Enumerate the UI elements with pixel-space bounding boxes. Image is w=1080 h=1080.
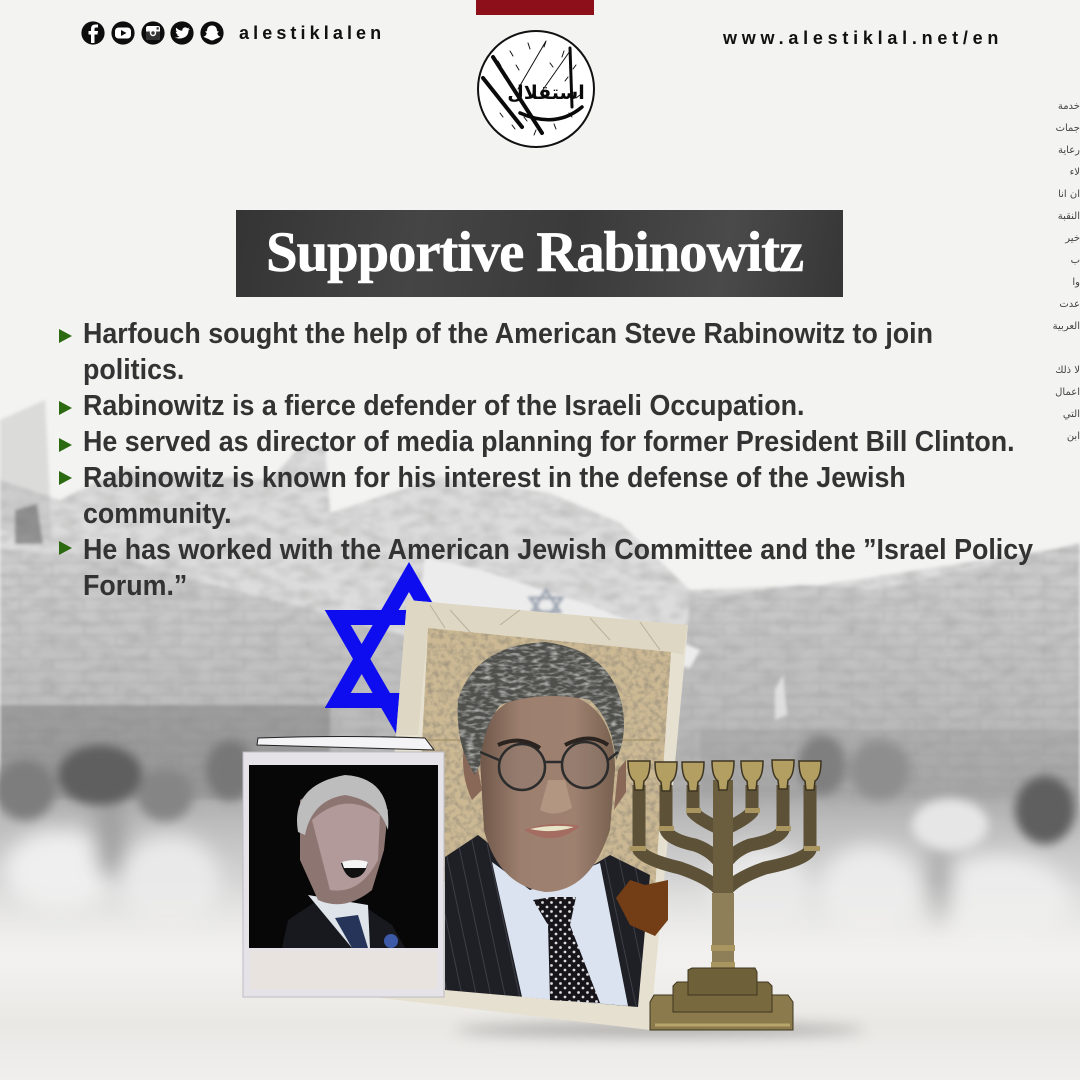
arms: [639, 785, 810, 895]
website url: www.alestiklal.net/en: [723, 28, 1003, 48]
hair: [458, 642, 624, 775]
suit: [445, 835, 650, 1007]
portrait: Rabinowitz: [445, 642, 668, 1007]
top red tab: [476, 0, 594, 15]
star of david: [338, 577, 480, 741]
base: [650, 968, 793, 1030]
wall texture in frame: [415, 628, 671, 890]
right edge arabic text scrap: وا: [1072, 277, 1080, 288]
wall and buildings: [0, 400, 1080, 850]
tie: [533, 897, 600, 1003]
right edge arabic text scrap: خدمة: [1058, 101, 1080, 112]
rust stain: [616, 880, 668, 936]
bullet 1 line 2: politics.: [83, 354, 184, 386]
right edge arabic text scrap: النقبة: [1058, 211, 1080, 222]
fence band: [0, 705, 330, 800]
ground shadow: [455, 1024, 865, 1036]
bullet marker 2: [59, 401, 72, 415]
right edge arabic text scrap: لا ذلك: [1055, 365, 1080, 376]
head: [480, 690, 615, 892]
title text: Supportive Rabinowitz: [266, 221, 803, 284]
logo: استقلال: [507, 82, 585, 104]
shirt: [492, 862, 628, 1006]
bullet 1 line 1: Harfouch sought the help of the American Steve Rabinowitz to join: [83, 318, 933, 350]
right edge arabic text scrap: لاء: [1070, 167, 1080, 178]
logo: [477, 30, 595, 148]
bullet marker 5: [59, 541, 72, 555]
bullet 5 line 1: He has worked with the American Jewish Committee and the ”Israel Policy: [83, 534, 1033, 566]
right edge arabic text scrap: رعاية: [1058, 145, 1080, 156]
bullet marker 3: [59, 438, 72, 452]
right edge arabic text scrap: عدت: [1059, 299, 1080, 310]
right edge arabic text scrap: ب: [1071, 255, 1080, 266]
bullet 2: Rabinowitz is a fierce defender of the Israeli Occupation.: [83, 390, 804, 422]
social icons: [81, 21, 224, 45]
right edge arabic text scrap: التي: [1063, 409, 1080, 420]
bullet marker 4: [59, 471, 72, 485]
torn paper backing: [373, 600, 688, 1030]
right edge arabic text scrap: جمات: [1056, 123, 1080, 134]
glasses: [480, 742, 618, 790]
bullet list: [59, 318, 1033, 602]
cups: [628, 760, 821, 791]
social handle: alestiklalen: [239, 23, 385, 43]
bullet 4 line 1: Rabinowitz is known for his interest in the defense of the Jewish: [83, 462, 906, 494]
right edge arabic text scrap: اعمال: [1055, 387, 1080, 398]
menorah: [628, 760, 821, 1030]
right edge arabic text scrap: خير: [1065, 233, 1080, 244]
title banner: [236, 210, 843, 297]
flag: [420, 557, 700, 668]
polaroid: Clinton: [243, 736, 444, 997]
bullet 4 line 2: community.: [83, 498, 232, 530]
bullet 3: He served as director of media planning for former President Bill Clinton.: [83, 426, 1015, 458]
right edge arabic text scrap: [1053, 101, 1080, 442]
right edge arabic text scrap: العربية: [1053, 321, 1080, 332]
scaffold at left edge: [0, 400, 52, 540]
crowd: [0, 735, 1080, 950]
bullet marker 1: [59, 329, 72, 343]
bullet 5 line 2: Forum.”: [83, 570, 187, 602]
right edge arabic text scrap: ابن: [1067, 431, 1080, 442]
stem: [713, 780, 733, 972]
right edge arabic text scrap: ان انا: [1058, 189, 1080, 200]
